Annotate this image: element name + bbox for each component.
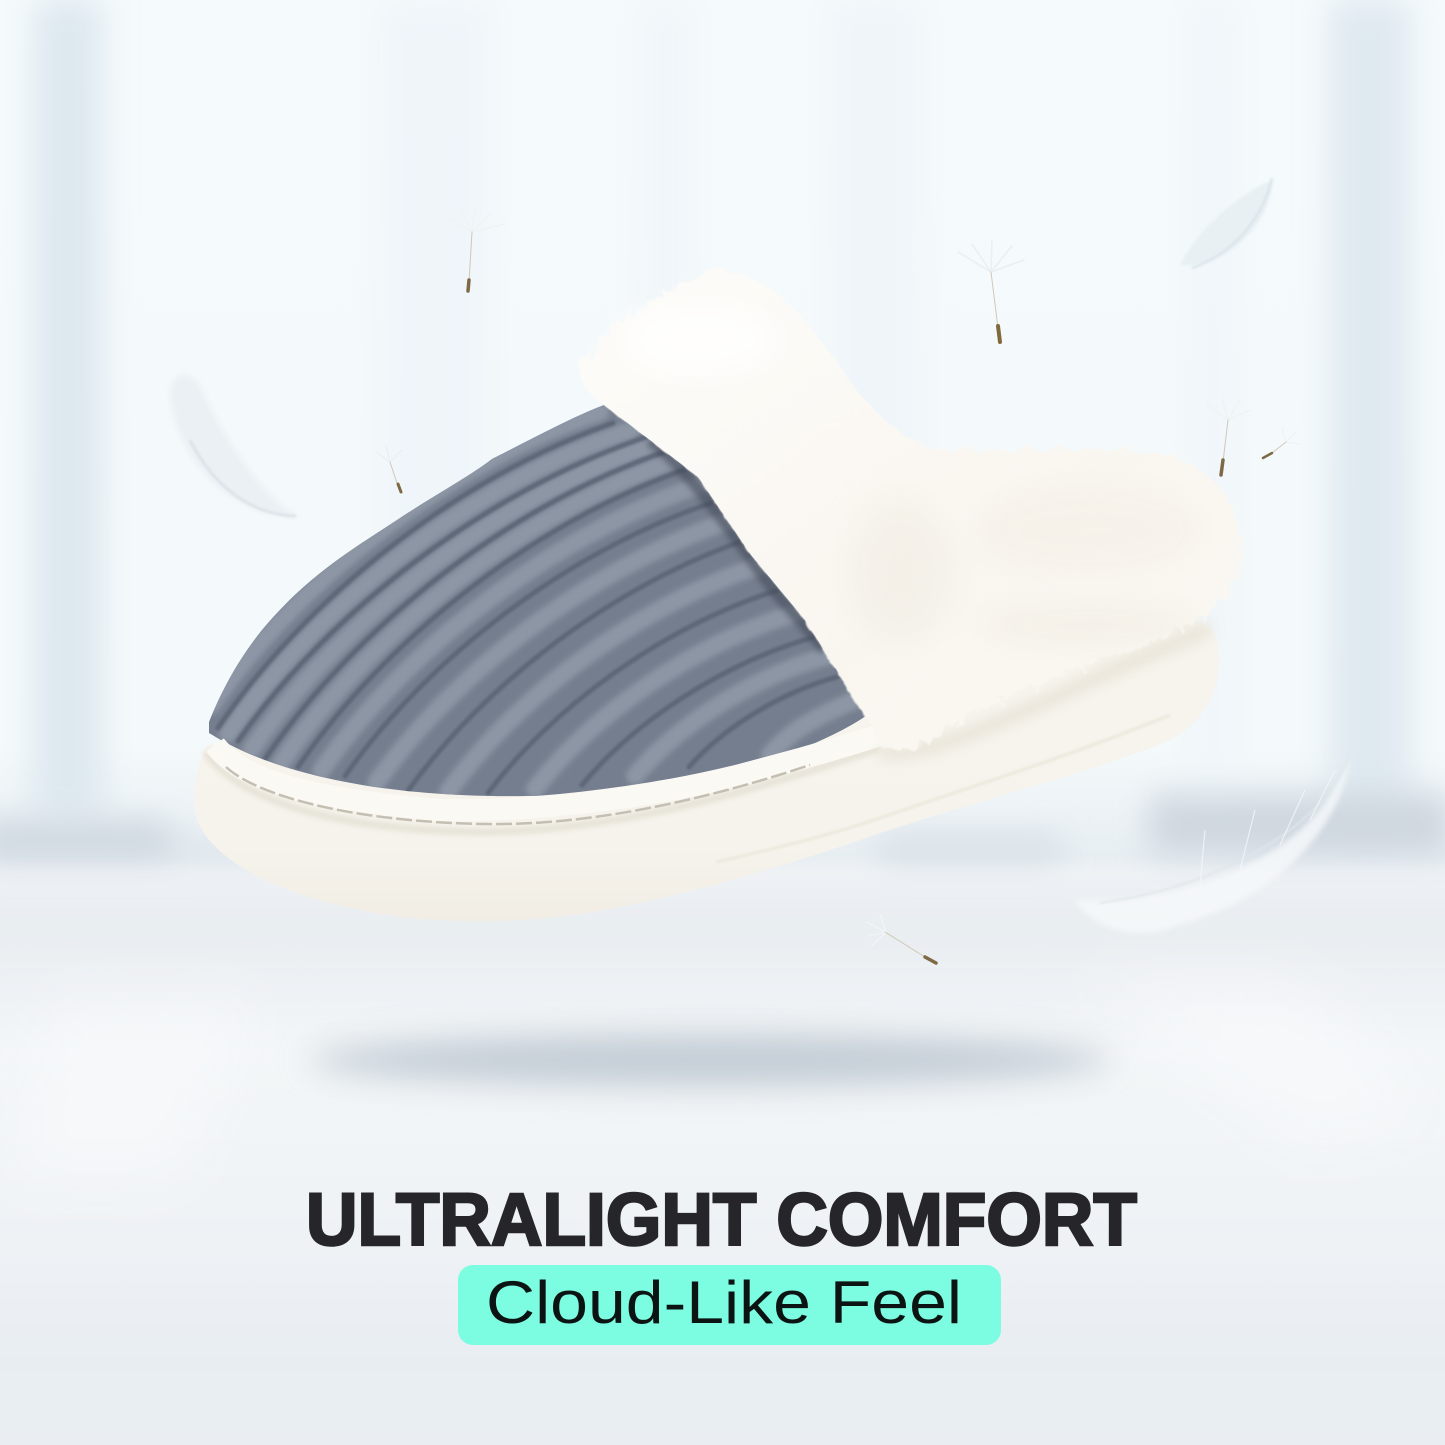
pill text: Cloud-Like Feel — [486, 1269, 962, 1336]
welt shadow — [205, 748, 880, 832]
fur collar — [580, 270, 1242, 751]
sole side crease — [716, 715, 1170, 862]
title: ULTRALIGHT COMFORT — [306, 1178, 1137, 1261]
seed 5 — [1263, 428, 1300, 458]
fur shading — [620, 305, 1200, 641]
welt stitching — [226, 765, 810, 824]
seed 2 — [958, 240, 1024, 342]
slipper — [190, 270, 1242, 921]
slipper floor shadow — [310, 1034, 1110, 1086]
feather: bottom right — [1075, 752, 1350, 933]
feather: top right — [1180, 178, 1273, 268]
subtitle pill — [458, 1265, 1001, 1345]
seed 1 — [450, 210, 504, 291]
seed 4 — [1206, 398, 1250, 475]
feather: left — [170, 375, 298, 517]
fur shadow on sole — [880, 628, 1210, 753]
corduroy upper — [209, 405, 866, 796]
seed 3 — [376, 446, 402, 492]
dandelion seeds — [376, 210, 1300, 963]
stitched welt — [215, 735, 880, 810]
seed 6 — [866, 914, 936, 963]
slipper sole — [194, 620, 1219, 921]
pill background — [458, 1265, 1001, 1345]
